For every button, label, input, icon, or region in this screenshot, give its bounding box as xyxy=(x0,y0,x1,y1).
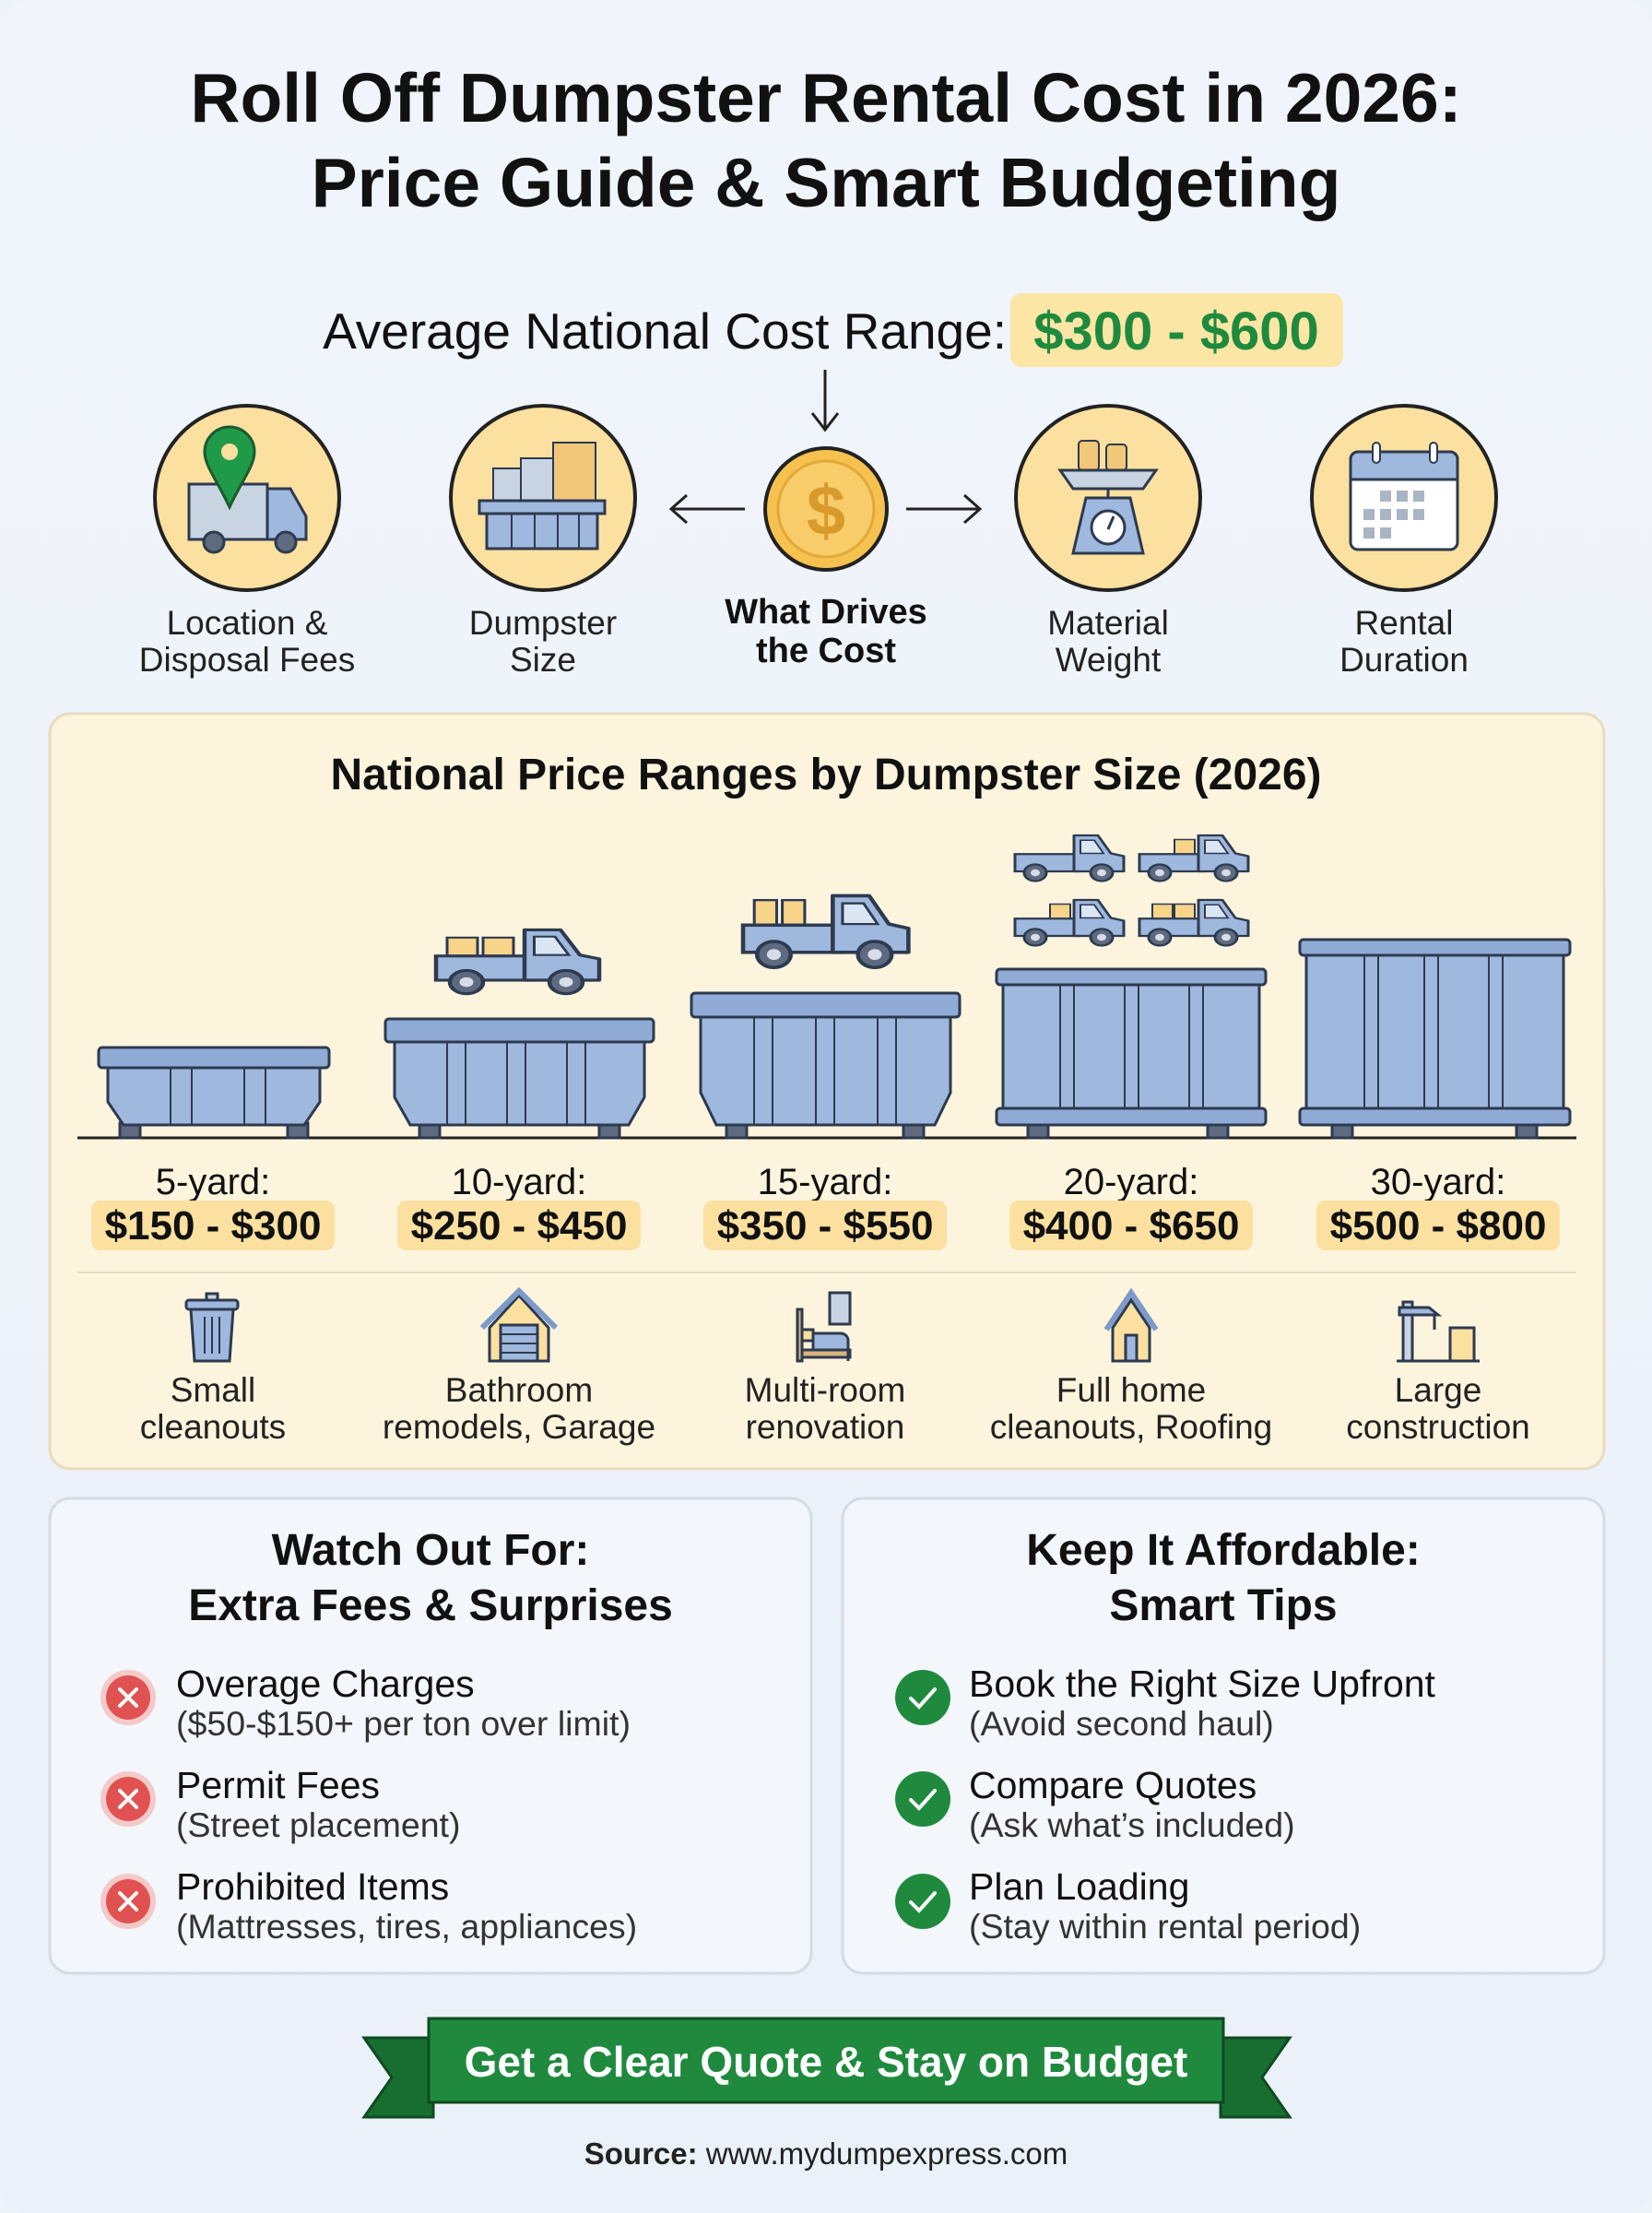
panel: price ranges xyxy=(50,714,1604,1469)
dumpster: 5-yard xyxy=(99,1047,329,1138)
panel: keep it affordable xyxy=(843,1498,1604,1973)
label: rental duration: Duration xyxy=(1339,641,1469,679)
heading: watch out: Watch Out For: xyxy=(272,1526,589,1575)
dumpster: 20-yard xyxy=(997,969,1266,1138)
title xyxy=(190,59,1462,221)
item: permit xyxy=(100,1764,460,1844)
title: Roll Off Dumpster Rental Cost in 2026: xyxy=(190,59,1462,136)
price labels: $400 - $650 xyxy=(1023,1203,1239,1249)
icon: garage xyxy=(482,1291,556,1361)
use case labels: Bathroom xyxy=(445,1371,593,1409)
use case labels xyxy=(140,1371,1530,1446)
tip: right size xyxy=(895,1663,1436,1743)
item: permit: Permit Fees xyxy=(176,1764,380,1806)
use case labels: Multi-room xyxy=(745,1371,905,1409)
item: overage: ($50-$150+ per ton over limit) xyxy=(176,1704,631,1743)
price labels xyxy=(91,1162,1560,1250)
tip: plan loading xyxy=(895,1865,1361,1946)
price labels: $150 - $300 xyxy=(105,1203,321,1249)
item: prohibited: Prohibited Items xyxy=(176,1865,449,1908)
label: dumpster size: Dumpster xyxy=(469,604,617,642)
label: rental duration: Rental xyxy=(1355,604,1453,642)
icon: coin xyxy=(765,448,887,570)
average cost range: Average National Cost Range: xyxy=(323,302,1007,360)
use case labels: cleanouts xyxy=(140,1408,286,1446)
label: dumpster size: Size xyxy=(510,641,576,679)
item: overage: Overage Charges xyxy=(176,1663,475,1705)
use case labels: construction xyxy=(1346,1408,1530,1446)
panel heading: National Price Ranges by Dumpster Size (2026) xyxy=(330,751,1322,799)
item: prohibited: (Mattresses, tires, appliances) xyxy=(176,1907,637,1946)
item: overage xyxy=(100,1663,631,1743)
source: Source: www.mydumpexpress.com xyxy=(584,2136,1068,2171)
price labels: 20-yard: xyxy=(1064,1162,1198,1202)
dumpster: 30-yard xyxy=(1300,940,1570,1138)
dumpster: 10-yard xyxy=(385,1019,654,1138)
use case labels: Full home xyxy=(1056,1371,1206,1409)
average cost range: $300 - $600 xyxy=(1033,302,1319,361)
use case labels: Small xyxy=(171,1371,255,1409)
tip: plan loading: (Stay within rental period) xyxy=(969,1907,1361,1946)
icon: trash can xyxy=(186,1294,238,1361)
panel: watch out for xyxy=(50,1498,811,1973)
heading: affordable: Keep It Affordable: xyxy=(1026,1526,1421,1575)
label: material weight: Material xyxy=(1047,604,1169,642)
arrow: down xyxy=(812,370,838,430)
tip: right size: (Avoid second haul) xyxy=(969,1704,1274,1743)
banner xyxy=(364,2018,1290,2117)
icon: scale xyxy=(1016,406,1200,590)
use case labels: Large xyxy=(1395,1371,1481,1409)
label: material weight: Weight xyxy=(1056,641,1162,679)
label: what drives the cost: What Drives xyxy=(725,593,927,632)
heading: watch out: Extra Fees & Surprises xyxy=(188,1581,673,1630)
banner: Get a Clear Quote & Stay on Budget xyxy=(465,2038,1187,2086)
icon: crane xyxy=(1397,1302,1480,1361)
tip: compare xyxy=(895,1764,1295,1844)
use case labels: cleanouts, Roofing xyxy=(990,1408,1272,1446)
price labels: 15-yard: xyxy=(758,1162,892,1202)
price labels: 5-yard: xyxy=(156,1162,270,1202)
tip: compare: (Ask what’s included) xyxy=(969,1805,1295,1844)
arrow: right xyxy=(906,495,980,523)
icon: location truck xyxy=(155,406,339,590)
tip: right size: Book the Right Size Upfront xyxy=(969,1663,1436,1705)
ground line xyxy=(77,1136,1576,1140)
label: what drives the cost: the Cost xyxy=(756,632,896,670)
price labels: 30-yard: xyxy=(1371,1162,1505,1202)
icon: bed xyxy=(797,1293,850,1361)
dumpster: 15-yard xyxy=(691,993,960,1138)
price labels: $500 - $800 xyxy=(1330,1203,1546,1249)
icon: coin: $ xyxy=(807,472,845,550)
arrow: left xyxy=(671,495,745,523)
heading: affordable: Smart Tips xyxy=(1109,1581,1338,1630)
price labels: 10-yard: xyxy=(452,1162,586,1202)
tip: plan loading: Plan Loading xyxy=(969,1865,1189,1908)
item: permit: (Street placement) xyxy=(176,1805,460,1844)
use case labels: remodels, Garage xyxy=(383,1408,655,1446)
trucks: 10-yard xyxy=(436,929,599,994)
trucks: 15-yard xyxy=(743,895,908,967)
item: prohibited xyxy=(100,1865,637,1946)
icon: dumpster size xyxy=(451,406,635,590)
label: location: Location & xyxy=(167,604,327,642)
title: Price Guide & Smart Budgeting xyxy=(312,144,1340,221)
use case labels: renovation xyxy=(746,1408,904,1446)
icon: calendar xyxy=(1312,406,1496,590)
average cost range xyxy=(323,293,1343,367)
price labels: $350 - $550 xyxy=(717,1203,933,1249)
trucks: 20-yard xyxy=(1015,835,1248,946)
label: location: Disposal Fees xyxy=(139,641,355,679)
icon: house xyxy=(1106,1293,1156,1361)
price labels: $250 - $450 xyxy=(411,1203,627,1249)
tip: compare: Compare Quotes xyxy=(969,1764,1257,1806)
